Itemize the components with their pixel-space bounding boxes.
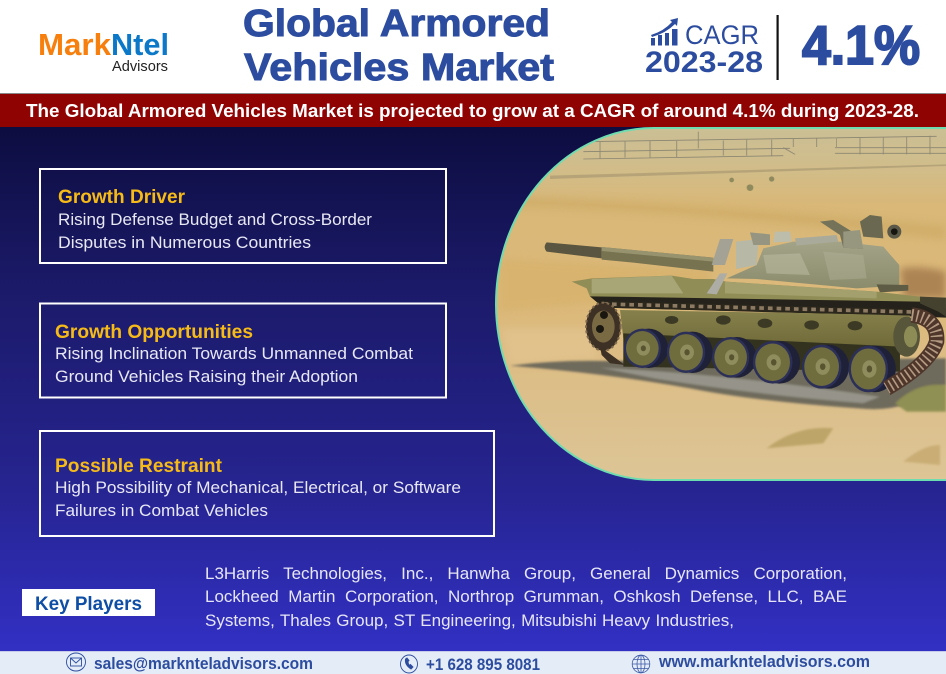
- logo: MarkNtel Advisors: [38, 27, 169, 75]
- panel: Growth Driver: [40, 169, 446, 263]
- fence: [583, 132, 946, 159]
- panel: Growth Driver: Growth Driver: [58, 187, 186, 208]
- title: [243, 3, 554, 89]
- shadow under deck: [590, 296, 946, 318]
- dark zone behind wheels: [623, 333, 900, 372]
- CAGR value: 4.1%: [802, 14, 920, 76]
- icon: email: [66, 653, 86, 671]
- panel: Possible Restraint: High Possibility of Mechanical, Electrical, or Software: [55, 478, 461, 497]
- CAGR label with chart icon: 2023-28: [645, 46, 763, 79]
- panel: Growth Opportunities: Growth Opportunities: [55, 322, 253, 343]
- key players list: Lockheed Martin Corporation, Northrop Grumman, Oshkosh Defense, LLC, BAE: [205, 587, 847, 606]
- divider: [776, 15, 779, 80]
- mantlet plates: [712, 239, 733, 265]
- grass tufts: [895, 385, 946, 412]
- phone number: +1 628 895 8081: [426, 655, 540, 674]
- panel: Growth Driver: Disputes in Numerous Countries: [58, 233, 311, 252]
- panel: Growth Opportunities: Rising Inclination Towards Unmanned Combat: [55, 344, 413, 363]
- icon: globe: [632, 655, 650, 673]
- drive sprocket: [586, 303, 621, 351]
- rear hull corner: [920, 297, 946, 317]
- small bushes: [729, 176, 774, 191]
- hull deck: [572, 276, 922, 302]
- panel: Possible Restraint: [40, 431, 494, 536]
- panel: Possible Restraint: Possible Restraint: [55, 456, 223, 477]
- panel: Possible Restraint: Failures in Combat Vehicles: [55, 501, 268, 520]
- key players list: [205, 564, 847, 630]
- email address: sales@marknteladvisors.com: [94, 654, 313, 673]
- turret: [727, 242, 899, 288]
- CAGR label with chart icon: CAGR: [685, 20, 759, 50]
- website: www.marknteladvisors.com: [658, 652, 870, 671]
- photo: tank in dry field: [496, 128, 946, 480]
- footer contact bar: [0, 651, 946, 674]
- logo: MarkNtel Advisors: Advisors: [112, 58, 168, 75]
- far dirt track: [550, 164, 946, 179]
- hull side: [620, 310, 910, 355]
- title: Vehicles Market: [244, 47, 554, 89]
- panel: Growth Opportunities: Ground Vehicles Raising their Adoption: [55, 367, 358, 386]
- panel: Growth Opportunities: [40, 304, 446, 398]
- rear track: [887, 315, 937, 388]
- logo: MarkNtel Advisors: Ntel: [111, 27, 169, 62]
- key players list: L3Harris Technologies, Inc., Hanwha Group, General Dynamics Corporation,: [205, 564, 847, 582]
- cupola and sights: [795, 235, 838, 246]
- road wheels: [624, 329, 668, 368]
- summary banner: The Global Armored Vehicles Market is projected to grow at a CAGR of around 4.1% during 2023-28.: [26, 100, 919, 121]
- key players list: Systems, Thales Group, ST Engineering, Mitsubishi Heavy Industries,: [205, 610, 734, 630]
- CAGR label with chart icon: [645, 18, 763, 79]
- Key Players label: Key Players: [35, 593, 142, 615]
- ground shadow: [510, 358, 946, 409]
- panel: Growth Driver: Rising Defense Budget and Cross-Border: [58, 210, 372, 229]
- title: Global Armored: [243, 3, 550, 45]
- logo: MarkNtel Advisors: Mark: [38, 27, 112, 62]
- upper track: [603, 304, 913, 312]
- Key Players label: [22, 589, 155, 616]
- icon: phone: [400, 655, 418, 673]
- header band: [0, 0, 946, 93]
- gun barrel: [545, 242, 602, 258]
- summary banner: [0, 93, 946, 127]
- idler wheel: [893, 317, 920, 357]
- icon: rising bar chart: [651, 18, 678, 46]
- soft field colour bands: [500, 197, 946, 365]
